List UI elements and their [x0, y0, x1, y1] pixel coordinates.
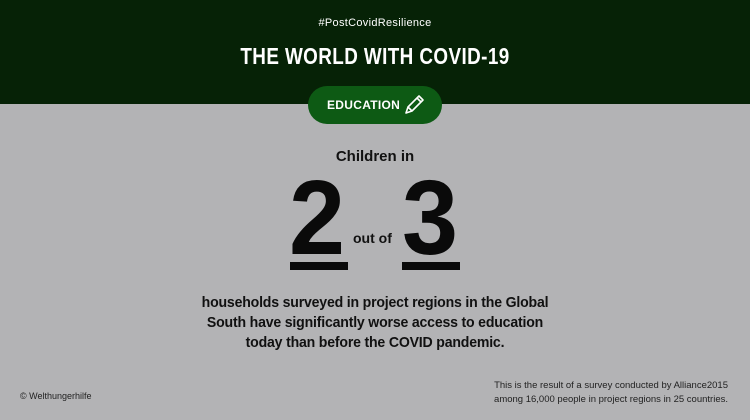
body text [202, 294, 548, 351]
stat: 2 out of 3: 2 [289, 159, 345, 277]
source note: This is the result of a survey conducted by Alliance2015 [494, 380, 728, 391]
body text: today than before the COVID pandemic. [246, 334, 504, 351]
source note [494, 380, 728, 405]
stat: 2 out of 3: 3 [402, 159, 458, 277]
pill: education: EDUCATION [327, 98, 400, 112]
hashtag: #PostCovidResilience [318, 17, 432, 29]
stat: 2 out of 3: out of [353, 230, 392, 246]
credit: © Welthungerhilfe [20, 391, 92, 401]
body text: South have significantly worse access to education [207, 314, 543, 331]
header band [0, 0, 750, 104]
pill: education [308, 86, 442, 124]
source note: among 16,000 people in project regions in 25 countries. [494, 394, 728, 405]
title: THE WORLD WITH COVID-19 [240, 43, 510, 69]
icon: pencil [405, 95, 424, 114]
body text: households surveyed in project regions in the Global [202, 294, 548, 311]
text: children in: Children in [336, 148, 414, 165]
stat: 2 out of 3 [289, 159, 460, 277]
